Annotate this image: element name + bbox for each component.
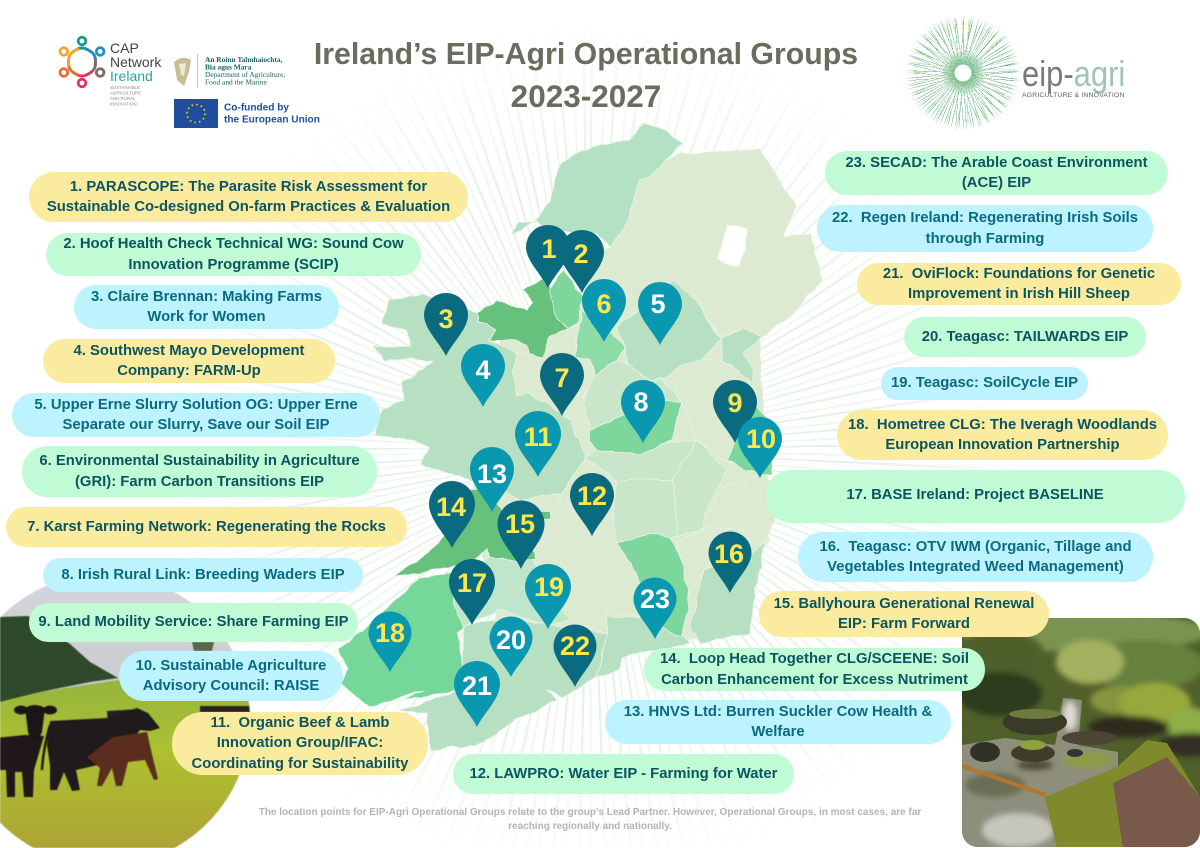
pin 11: 11 bbox=[524, 422, 552, 452]
Leitrim bbox=[548, 270, 583, 328]
Clare east spur bbox=[533, 510, 551, 522]
label 6 bbox=[22, 446, 377, 497]
logo wordmark: eip-agri bbox=[1022, 53, 1125, 94]
Mayo and Galway bbox=[372, 292, 587, 500]
pin 8: 8 bbox=[633, 387, 649, 417]
logo burst bbox=[905, 15, 1021, 131]
pin 5 bbox=[638, 282, 682, 345]
pin 7 bbox=[540, 353, 584, 416]
pin 11 bbox=[515, 411, 561, 477]
Lough Neagh bbox=[717, 225, 748, 267]
label 21 bbox=[857, 263, 1181, 305]
label 9: 9. Land Mobility Service: Share Farming EIP bbox=[38, 614, 349, 630]
map base bbox=[470, 300, 770, 640]
Roscommon bbox=[513, 323, 597, 460]
label 5 bbox=[12, 393, 380, 437]
label 19 bbox=[881, 367, 1088, 400]
logo: Co-funded by the European Union bbox=[174, 99, 320, 128]
pin 3 bbox=[424, 293, 468, 356]
label 10: Advisory Council: RAISE bbox=[143, 678, 319, 694]
Sligo bbox=[477, 278, 568, 358]
pin 2: 2 bbox=[573, 239, 589, 269]
pin 9: 9 bbox=[727, 388, 743, 418]
label 8: 8. Irish Rural Link: Breeding Waders EIP bbox=[61, 567, 345, 583]
label 3: 3. Claire Brennan: Making Farms bbox=[91, 288, 322, 304]
title bbox=[314, 38, 858, 114]
cow middle bbox=[47, 708, 160, 791]
pin 23 bbox=[634, 578, 676, 639]
label 10 bbox=[119, 651, 343, 701]
logo: Department of Agriculture: An Roinn Talmhaíochta, bbox=[205, 55, 283, 64]
label 11: Innovation Group/IFAC: bbox=[217, 735, 383, 751]
label 18: 18. Hometree CLG: The Iveragh Woodlands bbox=[848, 416, 1157, 432]
label 9 bbox=[29, 603, 358, 642]
Dublin bbox=[727, 405, 772, 475]
cow left bbox=[0, 735, 44, 797]
logo: CAP Network Ireland: AND RURAL bbox=[110, 96, 136, 101]
label 2: 2. Hoof Health Check Technical WG: Sound Cow bbox=[63, 236, 404, 252]
Meath bbox=[663, 360, 758, 470]
pin 10: 10 bbox=[746, 424, 776, 454]
label 8 bbox=[43, 558, 363, 592]
calf bbox=[87, 732, 158, 786]
Louth bbox=[720, 328, 763, 383]
label 11 bbox=[172, 712, 428, 775]
label 12: 12. LAWPRO: Water EIP - Farming for Water bbox=[470, 766, 777, 782]
pin 14 bbox=[429, 481, 475, 548]
pin 4 bbox=[461, 344, 505, 407]
pin 22: 22 bbox=[560, 631, 590, 661]
label 1 bbox=[29, 172, 468, 222]
label 23: 23. SECAD: The Arable Coast Environment bbox=[845, 154, 1148, 170]
label 19: 19. Teagasc: SoilCycle EIP bbox=[891, 375, 1078, 391]
label 12 bbox=[453, 754, 794, 794]
logo: eip-agri bbox=[906, 16, 1125, 130]
Longford bbox=[575, 310, 625, 377]
label 5: Separate our Slurry, Save our Soil EIP bbox=[62, 417, 330, 433]
Clare bbox=[393, 487, 535, 577]
label 16 bbox=[798, 532, 1153, 582]
label 14: Carbon Enhancement for Excess Nutriment bbox=[661, 672, 968, 688]
pin 4: 4 bbox=[475, 355, 491, 385]
label 21: 21. OviFlock: Foundations for Genetic bbox=[883, 266, 1155, 282]
Laois bbox=[613, 480, 677, 543]
logo: CAP Network Ireland: Network bbox=[110, 54, 162, 70]
label 5: 5. Upper Erne Slurry Solution OG: Upper Erne bbox=[34, 396, 358, 412]
Westmeath highlight bbox=[590, 400, 683, 455]
label 22: 22. Regen Ireland: Regenerating Irish Soils bbox=[832, 210, 1138, 226]
label 10: 10. Sustainable Agriculture bbox=[136, 658, 326, 674]
label 22: through Farming bbox=[926, 230, 1044, 246]
label 16: 16. Teagasc: OTV IWM (Organic, Tillage and bbox=[819, 538, 1132, 554]
label 2 bbox=[46, 233, 421, 276]
Waterford bbox=[597, 617, 690, 677]
pin 18: 18 bbox=[375, 618, 405, 648]
pin 23: 23 bbox=[640, 584, 670, 614]
label 2: Innovation Programme (SCIP) bbox=[128, 256, 339, 272]
pin 17: 17 bbox=[457, 568, 487, 598]
logo: Department of Agriculture: Food and the Marine bbox=[205, 78, 268, 86]
pin 6: 6 bbox=[596, 289, 612, 319]
label 13 bbox=[605, 700, 951, 744]
pin 8 bbox=[621, 380, 665, 443]
pin 13: 13 bbox=[477, 459, 507, 489]
label 15: EIP: Farm Forward bbox=[838, 616, 970, 632]
Carlow bbox=[677, 527, 743, 597]
Wicklow bbox=[703, 473, 777, 543]
Kildare bbox=[673, 440, 727, 537]
pin 6 bbox=[582, 279, 626, 342]
label 18 bbox=[837, 410, 1168, 460]
footnote: reaching regionally and nationally. bbox=[508, 821, 672, 832]
Wexford bbox=[690, 543, 765, 643]
pin 19: 19 bbox=[534, 572, 564, 602]
logo: CAP Network Ireland: Ireland bbox=[110, 68, 153, 84]
logo: CAP Network Ireland: CAP bbox=[110, 40, 139, 56]
logo: CAP Network Ireland: SUSTAINABLE bbox=[110, 85, 140, 90]
footnote bbox=[258, 807, 922, 832]
pin 20: 20 bbox=[496, 625, 526, 655]
label 6: (GRI): Farm Carbon Transitions EIP bbox=[75, 474, 324, 490]
pin 1: 1 bbox=[541, 234, 557, 264]
label 3: Work for Women bbox=[147, 309, 266, 325]
pin 19 bbox=[525, 564, 571, 629]
pin 15: 15 bbox=[505, 509, 535, 539]
label 17 bbox=[765, 470, 1185, 523]
Kilkenny bbox=[617, 533, 690, 637]
logo: Department of Agriculture bbox=[174, 54, 285, 88]
pin 7: 7 bbox=[554, 363, 570, 393]
logo: CAP Network Ireland: AGRICULTURE bbox=[110, 90, 141, 96]
label 15: 15. Ballyhoura Generational Renewal bbox=[774, 596, 1034, 612]
label 20: 20. Teagasc: TAILWARDS EIP bbox=[922, 329, 1128, 345]
pin 12 bbox=[570, 473, 614, 536]
pin 14: 14 bbox=[436, 492, 466, 522]
Cork bbox=[400, 617, 607, 750]
logo: Co-funded by the European Union: Co-funded by bbox=[224, 102, 289, 114]
logo: CAP Network Ireland bbox=[58, 36, 162, 106]
Northern Ireland bbox=[583, 148, 822, 337]
Donegal bbox=[512, 123, 683, 247]
pin 1 bbox=[526, 225, 570, 288]
Tipperary bbox=[530, 458, 650, 633]
Cavan and Monaghan bbox=[617, 280, 720, 380]
label 22 bbox=[817, 205, 1153, 252]
label 7: 7. Karst Farming Network: Regenerating the Rocks bbox=[27, 519, 386, 535]
logo: Co-funded by the European Union: the European Union bbox=[224, 114, 320, 126]
label 3 bbox=[74, 285, 339, 329]
pin 21 bbox=[454, 661, 500, 727]
pin 16 bbox=[708, 532, 752, 593]
pin 10 bbox=[738, 417, 782, 478]
label 14: 14. Loop Head Together CLG/SCEENE: Soil bbox=[660, 651, 969, 667]
title: 2023-2027 bbox=[511, 78, 661, 114]
pin 12: 12 bbox=[577, 481, 607, 511]
cow behind bbox=[106, 708, 141, 718]
title: Ireland’s EIP-Agri Operational Groups bbox=[314, 38, 858, 71]
pin 3: 3 bbox=[438, 304, 454, 334]
pin 13 bbox=[470, 447, 514, 512]
label 4: 4. Southwest Mayo Development bbox=[74, 342, 304, 358]
logo: Department of Agriculture: Bia agus Mara bbox=[205, 62, 252, 72]
pin 2 bbox=[560, 230, 604, 293]
pin 5: 5 bbox=[650, 289, 666, 319]
logo: CAP Network Ireland: INNOVATION bbox=[110, 102, 137, 106]
label 1: Sustainable Co-designed On-farm Practices & Evaluation bbox=[47, 199, 450, 215]
label 23 bbox=[825, 151, 1168, 195]
label 17: 17. BASE Ireland: Project BASELINE bbox=[846, 487, 1104, 503]
logo: Department of Agriculture: Department of Agriculture, bbox=[205, 70, 285, 79]
Limerick bbox=[453, 557, 570, 628]
Offaly bbox=[583, 440, 700, 480]
label 23: (ACE) EIP bbox=[962, 175, 1031, 191]
label 1: 1. PARASCOPE: The Parasite Risk Assessment for bbox=[70, 178, 427, 194]
label 15 bbox=[759, 591, 1049, 637]
label 18: European Innovation Partnership bbox=[885, 437, 1120, 453]
label 21: Improvement in Irish Hill Sheep bbox=[908, 286, 1130, 302]
label 6: 6. Environmental Sustainability in Agriculture bbox=[39, 453, 360, 469]
logo tagline: AGRICULTURE & INNOVATION bbox=[1022, 92, 1125, 99]
label 13: Welfare bbox=[751, 724, 805, 740]
footnote: The location points for EIP-Agri Operational Groups relate to the group’s Lead Partner. However, Operational Groups, in most cases, are far bbox=[259, 807, 921, 818]
label 14 bbox=[644, 648, 985, 691]
pin 22 bbox=[554, 624, 596, 687]
pin 21: 21 bbox=[462, 671, 492, 701]
pin 18 bbox=[368, 612, 412, 672]
label 20 bbox=[904, 317, 1146, 357]
pin 16: 16 bbox=[714, 539, 744, 569]
photo: woodland river bbox=[962, 618, 1200, 847]
pin 17 bbox=[449, 559, 495, 625]
photo: cows in a field bbox=[0, 586, 251, 848]
pin 15 bbox=[498, 501, 544, 569]
label 7 bbox=[6, 507, 407, 547]
pin 20 bbox=[490, 616, 532, 677]
label 4: Company: FARM-Up bbox=[117, 363, 261, 379]
Kerry bbox=[338, 573, 463, 707]
label 4 bbox=[43, 339, 335, 383]
pin 9 bbox=[713, 380, 757, 443]
label 13: 13. HNVS Ltd: Burren Suckler Cow Health & bbox=[624, 704, 932, 720]
Westmeath region bbox=[583, 360, 683, 430]
label 11: Coordinating for Sustainability bbox=[192, 756, 408, 772]
label 11: 11. Organic Beef & Lamb bbox=[210, 715, 390, 731]
label 16: Vegetables Integrated Weed Management) bbox=[827, 559, 1124, 575]
